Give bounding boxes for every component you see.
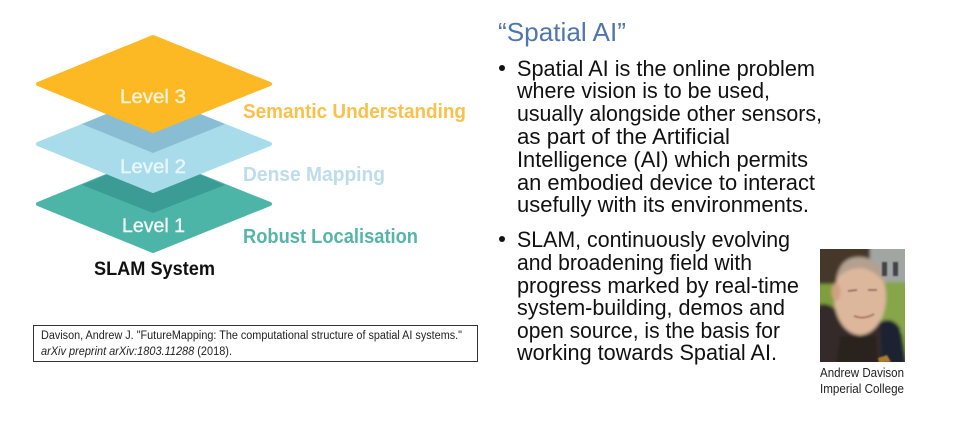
bullet: SLAM field: SLAM, continuously evolving [517,227,790,252]
photo caption [820,366,904,396]
bullet: SLAM field: working towards Spatial AI. [516,340,777,365]
bullet: spatial AI definition: where vision is to be used, [516,78,770,103]
level 1 label: Level 1 [122,216,185,237]
bullet: spatial AI definition: Spatial AI is the online problem [517,56,815,81]
photo caption: Andrew Davison [820,366,904,380]
bullet: SLAM field [499,227,799,365]
bullet: spatial AI definition: as part of the Artificial [517,124,730,149]
portrait photo of Andrew Davison [820,249,905,362]
semantic understanding label: Semantic Understanding [243,101,466,123]
level 2 label: Level 2 [120,157,186,178]
level 2 layer [38,95,270,191]
photo caption: Imperial College [820,382,904,396]
bullet: SLAM field: system-building, demos and [517,295,785,320]
title: “Spatial AI” [498,17,626,47]
bullet: spatial AI definition: Intelligence (AI) which permits [517,147,808,172]
bullet: SLAM field: and broadening field with [517,250,752,275]
level 1 layer [38,155,270,251]
robust localisation label: Robust Localisation [243,226,418,248]
dense mapping label: Dense Mapping [243,164,385,186]
bullet: spatial AI definition: usefully with its environments. [517,192,809,217]
SLAM system stacked diagram [38,37,466,280]
level 3 layer [38,37,270,131]
bullet: SLAM field: open source, is the basis for [517,318,780,343]
citation box: Davison, Andrew J. "FutureMapping: The computational structure of spatial AI systems." [41,330,462,342]
SLAM system caption: SLAM System [94,259,215,280]
bullet: SLAM field: progress marked by real-time [517,273,799,298]
level 3 label: Level 3 [120,87,186,108]
bullet: spatial AI definition: usually alongside other sensors, [517,101,822,126]
citation box: arXiv preprint arXiv:1803.11288 (2018). [41,346,232,358]
citation box [34,326,478,362]
bullet: spatial AI definition: an embodied device to interact [517,170,815,195]
bullet: spatial AI definition [499,56,822,217]
